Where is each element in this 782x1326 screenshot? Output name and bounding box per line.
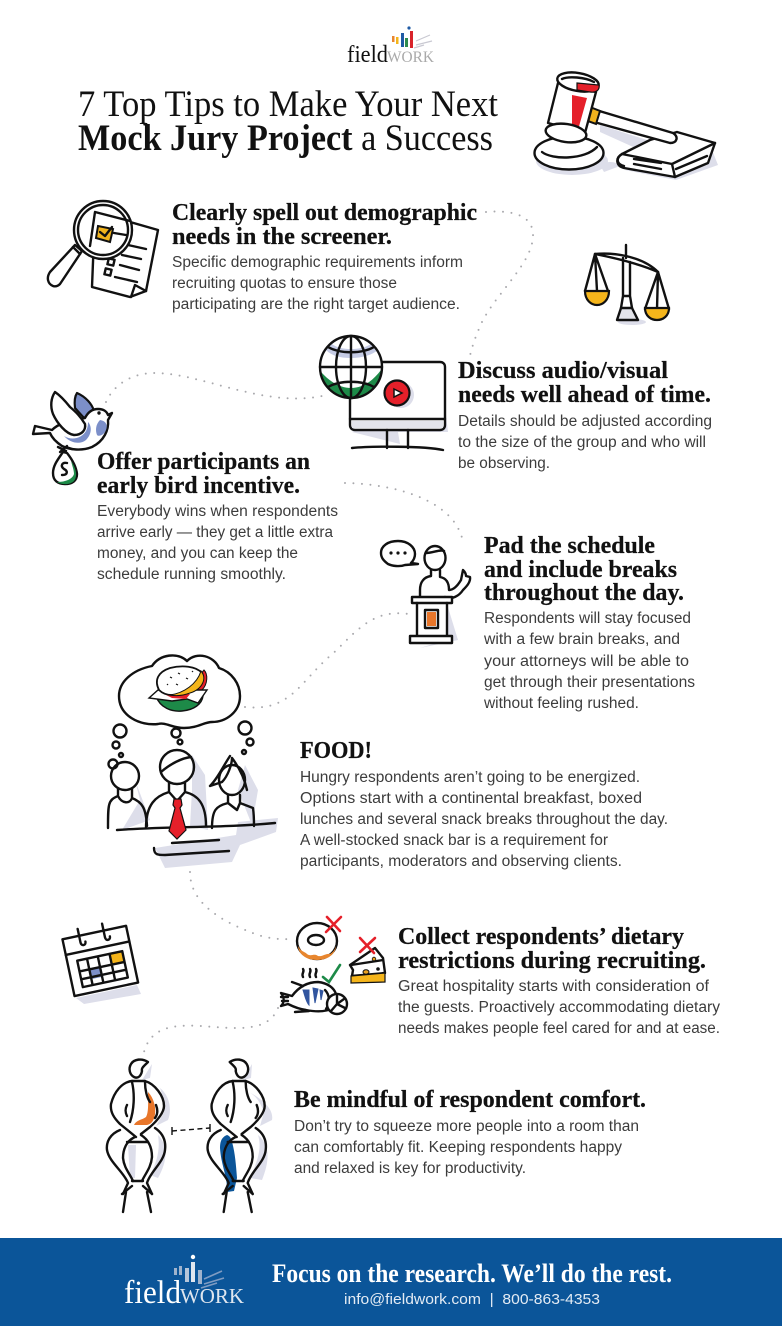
text block: arrive early — they get a little extra — [97, 524, 333, 541]
text block: Great hospitality starts with consideration of — [398, 978, 710, 995]
panel: tip 1 demographic needs — [48, 200, 477, 313]
orange highlight — [134, 1092, 155, 1125]
text block: needs makes people feel cared for and at ease. — [398, 1020, 720, 1037]
heading: Discuss audio/visual — [458, 358, 668, 384]
footer band — [0, 1238, 782, 1326]
heading: and include breaks — [484, 557, 677, 583]
heading: Pad the schedule — [484, 533, 655, 559]
heading — [398, 924, 706, 974]
logo: fieldwork footer: field — [124, 1275, 181, 1311]
panel: tip 5 food — [108, 655, 668, 870]
text block: Respondents will stay focused — [484, 610, 691, 627]
icon: monitor with globe and play button — [320, 336, 448, 450]
person right — [208, 1060, 266, 1212]
heading: Collect respondents’ dietary — [398, 924, 684, 950]
text block: participants, moderators and observing clients. — [300, 853, 622, 870]
text block: without feeling rushed. — [483, 695, 639, 712]
dotted connector: dietary to comfort — [144, 1008, 278, 1052]
text block: your attorneys will be able to — [484, 653, 689, 670]
text block: Don’t try to squeeze more people into a room than — [294, 1118, 639, 1135]
text block: Specific demographic requirements inform — [172, 254, 463, 271]
logo: fieldwork header: WORK — [387, 49, 435, 66]
title — [78, 84, 499, 159]
text block: lunches and several snack breaks throughout the day. — [300, 811, 668, 828]
text block: to the size of the group and who will — [458, 434, 706, 451]
text block — [172, 254, 463, 313]
heading — [484, 533, 684, 606]
head — [548, 83, 596, 133]
icon: magnifying glass over checklist — [48, 201, 158, 297]
handle — [594, 110, 677, 143]
logo: fieldwork footer — [124, 1255, 244, 1311]
burger — [156, 696, 203, 711]
heading: needs in the screener. — [172, 224, 392, 250]
contact details: info@fieldwork.com | 800-863-4353 — [344, 1291, 600, 1308]
icon: calendar — [61, 919, 141, 1004]
text block: schedule running smoothly. — [97, 566, 286, 583]
title: 7 Top Tips to Make Your Next — [78, 84, 499, 125]
text block: get through their presentations — [484, 674, 695, 691]
heading: FOOD! — [300, 738, 372, 764]
text block: and relaxed is key for productivity. — [294, 1160, 526, 1177]
heading: Be mindful of respondent comfort. — [294, 1087, 646, 1113]
text block — [294, 1118, 639, 1177]
heading — [97, 449, 310, 499]
text block: Everybody wins when respondents — [97, 503, 338, 520]
text block: recruiting quotas to ensure those — [172, 275, 397, 292]
logo: fieldwork footer: WORK — [180, 1284, 244, 1308]
panel: tip 6 dietary — [281, 917, 720, 1037]
text block: Hungry respondents aren’t going to be energized. — [300, 769, 640, 786]
panel: tip 7 comfort — [107, 1060, 646, 1212]
text block: participating are the right target audience. — [172, 296, 460, 313]
heading — [458, 358, 711, 408]
text block: A well-stocked snack bar is a requirement for — [300, 832, 608, 849]
dotted connector: tip 3 to tip 4 — [345, 483, 463, 542]
panel: tip 4 schedule — [381, 533, 695, 712]
text block: Details should be adjusted according — [458, 413, 712, 430]
base — [534, 136, 604, 170]
heading: early bird incentive. — [97, 473, 300, 499]
logo: fieldwork header: field — [347, 42, 388, 68]
heading: needs well ahead of time. — [458, 382, 711, 408]
logo: fieldwork header — [347, 26, 435, 68]
panel: tip 2 audio visual — [320, 336, 712, 472]
person left — [107, 1060, 165, 1212]
text block: money, and you can keep the — [97, 545, 298, 562]
tagline: Focus on the research. We’ll do the rest. — [272, 1259, 672, 1288]
text block: the guests. Proactively accommodating dietary — [398, 999, 720, 1016]
text block: with a few brain breaks, and — [483, 631, 680, 648]
heading: Clearly spell out demographic — [172, 200, 477, 226]
heading — [172, 200, 477, 250]
spacing marker — [172, 1124, 210, 1135]
panel: tip 3 early bird — [33, 392, 338, 583]
icon: speaker at podium with speech bubble — [381, 541, 470, 648]
heading: throughout the day. — [484, 580, 684, 606]
icon: donut, cheese and fish — [281, 917, 385, 1014]
text block: can comfortably fit. Keeping respondents happy — [294, 1139, 622, 1156]
icon: gavel and book — [534, 69, 718, 180]
dotted connector: tip 4 to food — [245, 613, 408, 708]
text block — [97, 503, 338, 583]
person shadows — [128, 1064, 170, 1178]
heading: Offer participants an — [97, 449, 310, 475]
dotted connector: tip 2 to tip 3 — [106, 373, 322, 402]
icon: bird carrying money bag — [33, 392, 112, 484]
heading: restrictions during recruiting. — [398, 948, 706, 974]
icon: two seated people with spacing — [107, 1060, 272, 1212]
text block — [398, 978, 720, 1037]
text block — [458, 413, 712, 472]
text block: Options start with a continental breakfast, boxed — [300, 790, 642, 807]
title: Mock Jury Project a Success — [78, 118, 493, 159]
dotted connector: food to dietary — [190, 872, 290, 939]
icon: jurors thinking about burger — [108, 655, 278, 868]
text block — [300, 769, 668, 870]
text block: be observing. — [458, 455, 550, 472]
blue highlight — [220, 1135, 237, 1192]
text block — [483, 610, 695, 712]
icon: scales of justice — [585, 245, 669, 325]
book — [617, 132, 715, 177]
dotted connector: tip 1 to tip 2 — [469, 212, 533, 360]
